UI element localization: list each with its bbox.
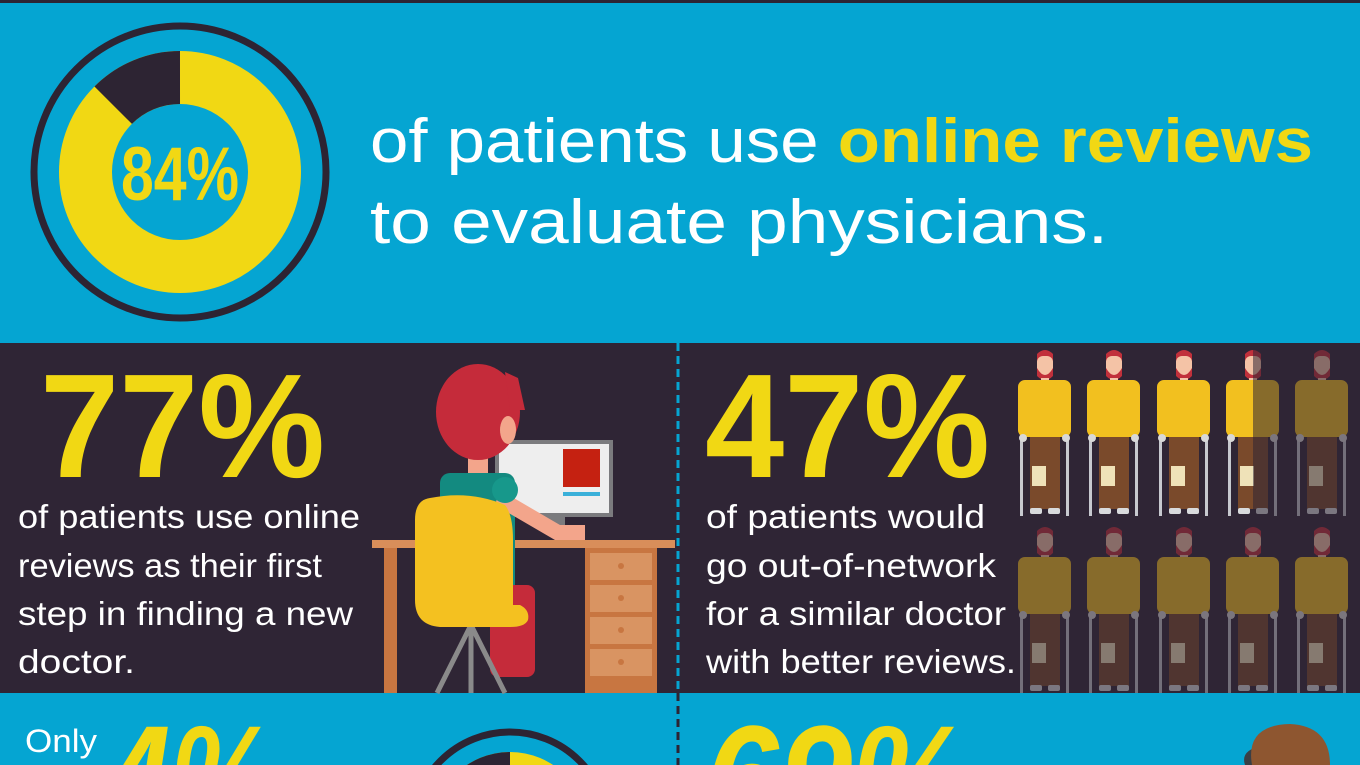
stat 77%: reviews as their first: [18, 547, 322, 584]
donut chart: 84%: [34, 26, 326, 318]
divider dashed: [676, 343, 680, 765]
stat 47%: 47%: [705, 344, 990, 509]
top border: [0, 0, 1360, 3]
pictogram: 10 patients, 4.7 highlighted: [1018, 345, 1348, 693]
bottom donut: [412, 732, 608, 765]
headline: of patients use online reviews: [370, 107, 1313, 176]
bottom stat: Only 4%: [25, 694, 275, 765]
stat 47%: [705, 344, 1016, 680]
donut chart: 84%: 84%: [121, 132, 239, 217]
stat 47%: for a similar doctor: [706, 595, 1006, 632]
stat 77%: [18, 344, 360, 680]
dark band: [0, 343, 1360, 693]
stat 77%: of patients use online: [18, 498, 360, 535]
headline: [370, 107, 1313, 257]
stat 47%: of patients would: [706, 498, 985, 535]
illustration: doctor head: [1244, 724, 1330, 765]
bottom stat: Only 4%: Only: [25, 723, 97, 759]
stat 47%: with better reviews.: [705, 643, 1016, 680]
stat 77%: doctor.: [18, 643, 135, 680]
headline: to evaluate physicians.: [370, 188, 1108, 257]
stat 47%: go out-of-network: [706, 547, 997, 584]
stat 77%: step in finding a new: [18, 595, 353, 632]
stat 77%: 77%: [40, 344, 325, 509]
illustration: person at computer: [372, 364, 675, 693]
